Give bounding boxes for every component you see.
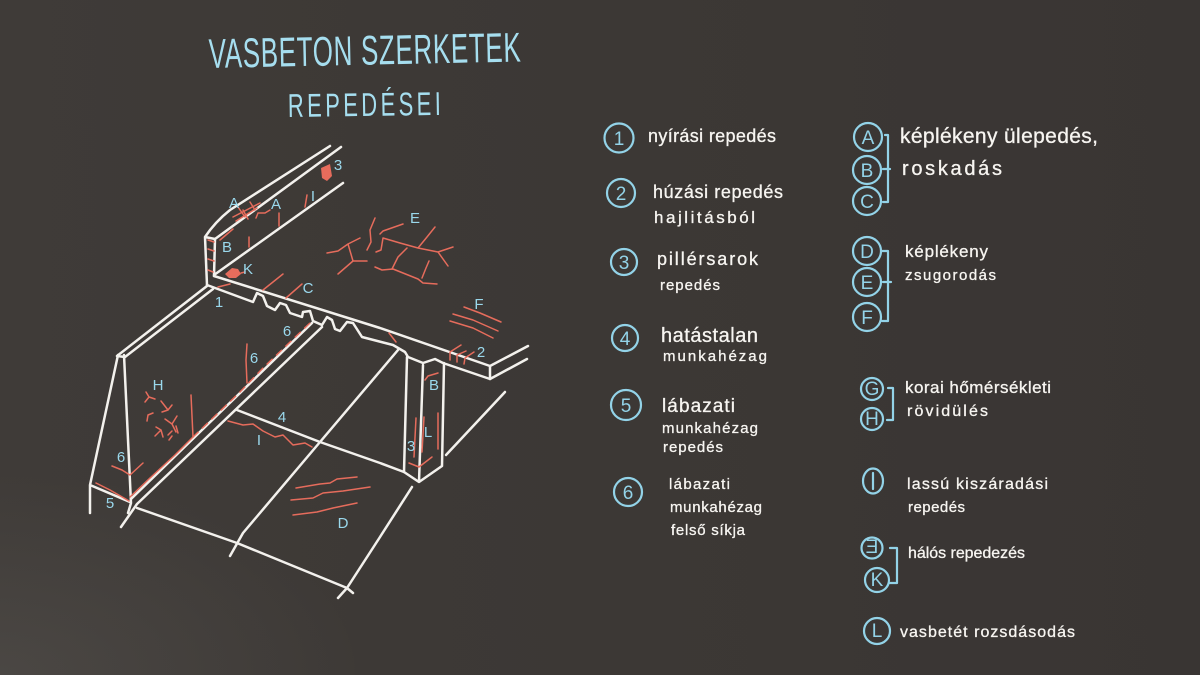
diagram letter and number labels: A bbox=[229, 195, 239, 212]
diagram letter and number labels: C bbox=[303, 280, 314, 297]
title bbox=[208, 25, 521, 124]
structure outline bbox=[90, 146, 528, 598]
diagram letter and number labels: F bbox=[474, 296, 484, 313]
diagram letter and number labels: 3 bbox=[334, 157, 342, 174]
group A B C: B bbox=[861, 161, 873, 182]
group A B C: roskadás bbox=[902, 158, 1002, 180]
item 1: nyírási repedés bbox=[648, 126, 776, 146]
item 5: repedés bbox=[663, 439, 723, 456]
diagram letter and number labels: L bbox=[424, 424, 432, 441]
group D E F: F bbox=[861, 308, 873, 329]
red cracks bbox=[96, 164, 501, 515]
diagram letter and number labels: B bbox=[222, 239, 232, 256]
item 4 bbox=[612, 325, 767, 365]
item 5: lábazati bbox=[662, 396, 735, 417]
diagram letter and number labels: 1 bbox=[215, 294, 223, 311]
diagram letter and number labels: 5 bbox=[106, 495, 114, 512]
item L: L bbox=[872, 621, 882, 642]
item 6 bbox=[614, 476, 762, 539]
item 4: munkahézag bbox=[663, 348, 767, 365]
item 3: repedés bbox=[660, 277, 720, 294]
item 5 bbox=[611, 390, 758, 456]
diagram letter and number labels: 2 bbox=[477, 344, 485, 361]
item 6: 6 bbox=[623, 483, 633, 504]
item 2: hajlitásból bbox=[654, 208, 755, 227]
diagram letter and number labels: I bbox=[257, 432, 261, 449]
title: VASBETON SZERKETEK bbox=[208, 25, 521, 78]
group D E F: D bbox=[860, 242, 874, 263]
diagram letter and number labels bbox=[106, 157, 485, 532]
item 5: munkahézag bbox=[662, 420, 758, 437]
group A B C: C bbox=[860, 192, 874, 213]
diagram letter and number labels: K bbox=[243, 261, 253, 278]
item 5: 5 bbox=[621, 396, 631, 417]
group 3 K: K bbox=[871, 570, 884, 591]
title: REPEDÉSEI bbox=[288, 85, 441, 124]
item 6: felső síkja bbox=[671, 522, 746, 539]
diagram letter and number labels: 4 bbox=[278, 409, 286, 426]
item 4: 4 bbox=[620, 329, 631, 350]
group G H: H bbox=[865, 409, 879, 430]
diagram letter and number labels: 6 bbox=[250, 350, 258, 367]
diagram letter and number labels: I bbox=[311, 188, 315, 205]
group G H bbox=[861, 378, 1051, 430]
item I bbox=[863, 468, 1048, 516]
group A B C: képlékeny ülepedés, bbox=[900, 125, 1098, 148]
group G H: korai hőmérsékleti bbox=[905, 378, 1051, 397]
pattern cracks: pillar corner patch and K patch bbox=[225, 164, 332, 278]
item 1: 1 bbox=[614, 129, 624, 150]
item 6: lábazati bbox=[669, 476, 730, 493]
group 3 K bbox=[862, 537, 1025, 592]
item 2: húzási repedés bbox=[653, 182, 783, 202]
diagram letter and number labels: B bbox=[429, 377, 439, 394]
group 3 K: hálós repedezés bbox=[908, 545, 1025, 562]
group D E F bbox=[853, 237, 996, 331]
group A B C: A bbox=[862, 128, 875, 149]
item 4: hatástalan bbox=[661, 325, 758, 347]
item 2: 2 bbox=[616, 184, 626, 205]
diagram letter and number labels: 6 bbox=[283, 323, 291, 340]
item I: lassú kiszáradási bbox=[907, 476, 1048, 493]
diagram letter and number labels: 6 bbox=[117, 449, 125, 466]
item 6: munkahézag bbox=[670, 499, 762, 516]
item 2 bbox=[607, 179, 783, 227]
group D E F: képlékeny bbox=[905, 242, 988, 261]
diagram letter and number labels: A bbox=[271, 196, 281, 213]
group G H: rövidülés bbox=[907, 403, 988, 420]
group 3 K: Ǝ bbox=[866, 537, 878, 558]
item L bbox=[864, 618, 1075, 644]
diagram letter and number labels: D bbox=[338, 515, 349, 532]
legend: lettered crack types bbox=[853, 123, 1098, 644]
item I: repedés bbox=[908, 499, 965, 516]
group D E F: zsugorodás bbox=[905, 267, 996, 284]
diagram letter and number labels: E bbox=[410, 210, 420, 227]
group G H: G bbox=[865, 379, 879, 400]
item 3: pillérsarok bbox=[657, 249, 759, 269]
diagram: reinforced concrete structure with cracks bbox=[90, 146, 528, 598]
item 3: 3 bbox=[619, 253, 629, 274]
item 1 bbox=[604, 124, 776, 152]
item 3 bbox=[611, 249, 759, 294]
legend: numbered crack types bbox=[604, 124, 783, 539]
diagram letter and number labels: H bbox=[153, 377, 163, 394]
group D E F: E bbox=[861, 273, 873, 294]
group A B C bbox=[853, 123, 1098, 215]
diagram letter and number labels: 3 bbox=[407, 438, 415, 455]
item L: vasbetét rozsdásodás bbox=[900, 624, 1075, 641]
